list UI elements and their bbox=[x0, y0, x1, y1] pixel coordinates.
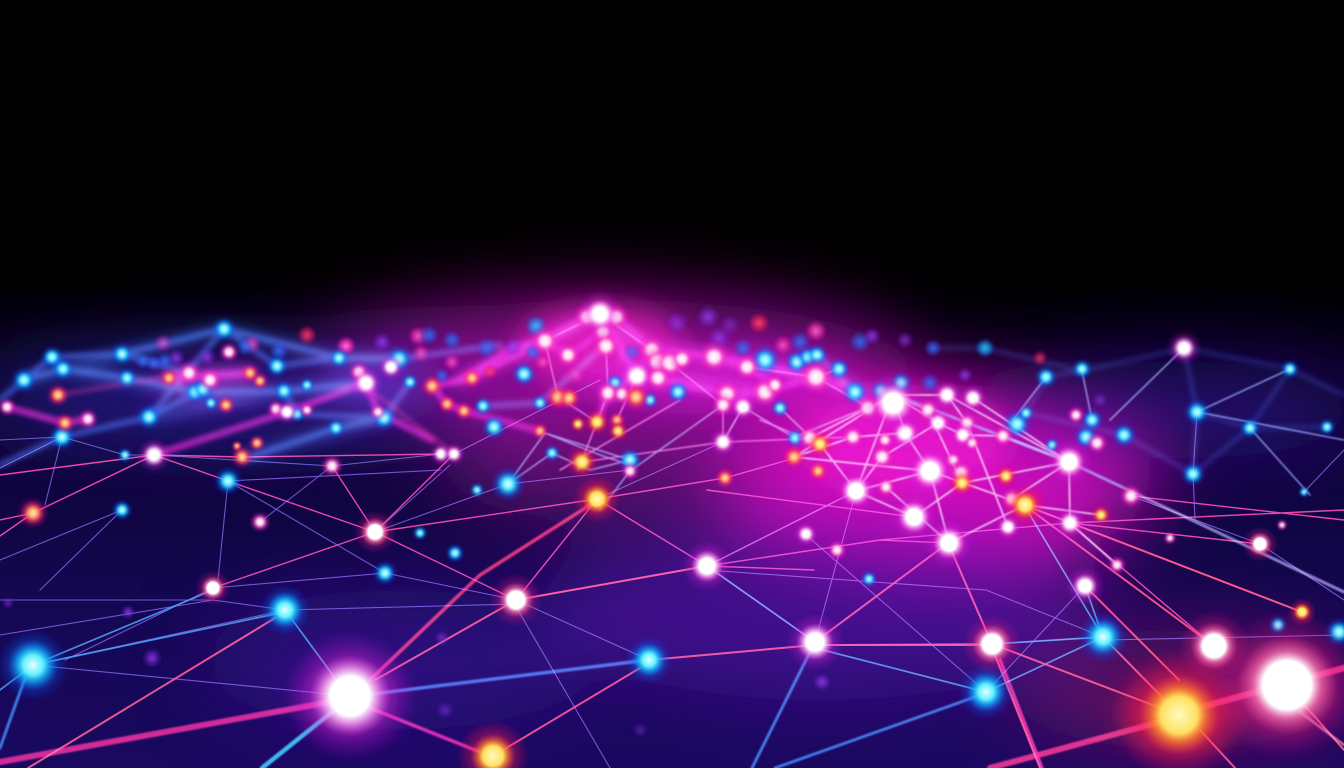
node: central peak bbox=[576, 290, 624, 338]
pink and orange ridge nodes bbox=[0, 290, 1288, 575]
thick pale beam on right ridge bbox=[895, 395, 1344, 592]
cyan ridge nodes bbox=[11, 316, 1344, 647]
foreground links: thick beams bbox=[0, 505, 1344, 768]
node: cyan left edge bbox=[0, 629, 69, 701]
node: orange bottom bbox=[457, 720, 529, 768]
ambient glow bbox=[0, 300, 1344, 750]
far ridge haze: wide blurred strands bbox=[24, 314, 870, 455]
node: large white left bbox=[284, 630, 416, 762]
mid field nodes bbox=[195, 437, 1316, 627]
peak bloom bbox=[150, 307, 1342, 750]
ridge links: finer bright strands bbox=[508, 314, 1344, 565]
foreground links: thin lines bbox=[0, 380, 1344, 768]
out-of-focus distant nodes bbox=[2, 305, 1108, 738]
node: large yellow right bbox=[1113, 649, 1245, 768]
far ridge links: soft blurred strands bbox=[0, 314, 1344, 474]
foreground nodes bbox=[0, 584, 1344, 768]
hub: white cyan apex of right ridge bbox=[861, 371, 925, 435]
node: large white right bbox=[1211, 609, 1344, 761]
